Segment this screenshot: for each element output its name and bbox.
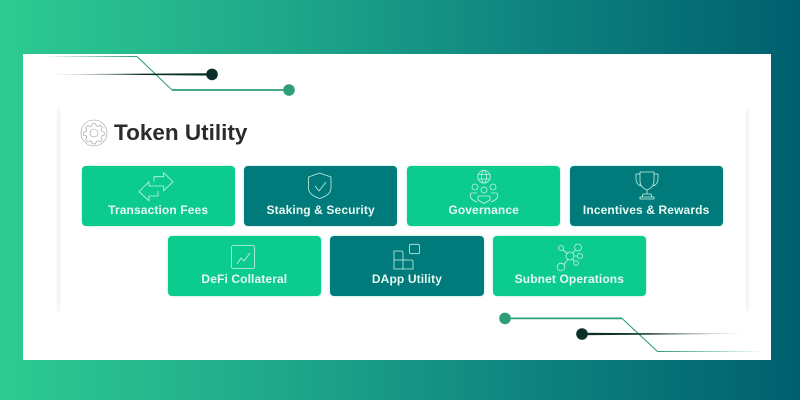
icon: exchange arrows: [138, 172, 174, 202]
card: Transaction Fees: [82, 166, 235, 226]
icon: network nodes: [556, 244, 583, 272]
card: Staking & Security: [244, 166, 397, 226]
label: DApp Utility: [372, 272, 442, 286]
inner content panel: [60, 108, 746, 312]
card: Governance: [407, 166, 560, 226]
label: Transaction Fees: [108, 203, 208, 217]
label: DeFi Collateral: [201, 272, 287, 286]
icon: shield check: [308, 172, 332, 199]
title: Token Utility: [114, 120, 247, 145]
label: Staking & Security: [267, 203, 375, 217]
white panel: [23, 54, 771, 360]
icon: people and globe: [470, 170, 498, 204]
card: DeFi Collateral: [168, 236, 321, 296]
card: Incentives & Rewards: [570, 166, 723, 226]
card: DApp Utility: [330, 236, 484, 296]
icon: chart line: [231, 245, 255, 269]
label: Incentives & Rewards: [583, 203, 709, 217]
icon: app blocks: [394, 244, 420, 270]
label: Subnet Operations: [515, 272, 624, 286]
icon: trophy: [636, 172, 658, 200]
card: Subnet Operations: [493, 236, 646, 296]
icon: gear: [80, 120, 108, 146]
label: Governance: [448, 203, 519, 217]
